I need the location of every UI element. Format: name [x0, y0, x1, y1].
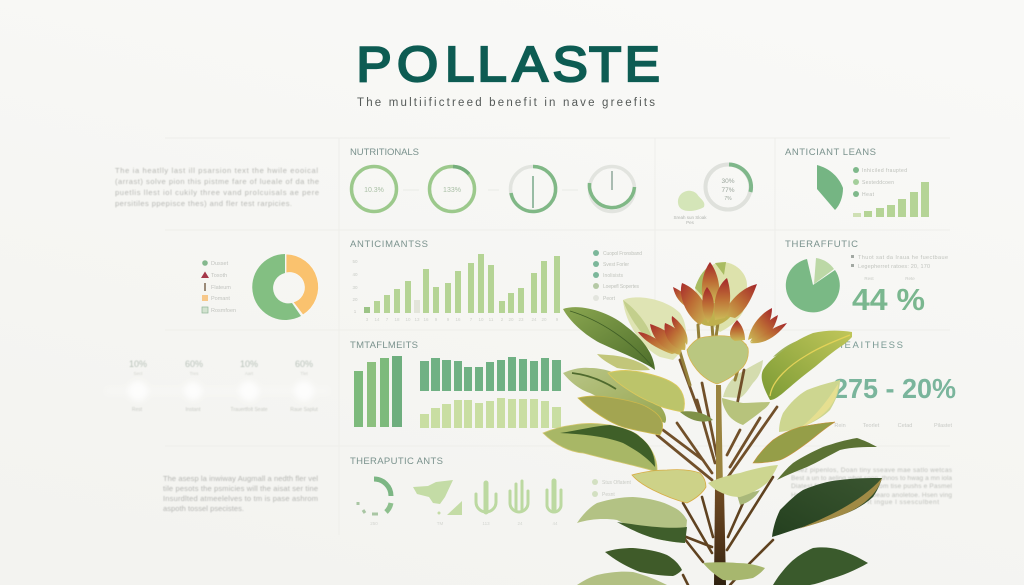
small leaf by stem	[680, 411, 713, 422]
heading: THERAFFUTIC	[785, 239, 858, 250]
small labels: Rete	[905, 276, 915, 281]
donut ring	[706, 164, 751, 210]
heading: TMTAFLMEITS	[350, 340, 418, 351]
leaf: small under stem	[737, 490, 760, 505]
stat captions: Trauertfolt Seate	[230, 407, 268, 413]
x axis labels: 2	[501, 317, 504, 322]
x axis labels	[366, 317, 559, 322]
panel: antioxidants	[350, 239, 642, 322]
legend text	[602, 480, 632, 498]
captions: Pilastet	[934, 423, 952, 429]
leaf: right pale	[779, 380, 840, 432]
legend text	[211, 261, 236, 314]
ring 1: 10.3%	[364, 187, 384, 194]
bullets	[851, 255, 948, 270]
glow band	[105, 381, 330, 401]
y axis labels: 50	[352, 259, 358, 264]
back leaves	[597, 262, 817, 398]
bud: left	[638, 316, 688, 355]
leaf: left middle yellow	[608, 371, 684, 412]
text block: Diatest feirotas neh fumaly from tise pushs e Pasmel	[791, 483, 953, 490]
bottom bars	[420, 398, 561, 428]
ring values: 7%	[724, 196, 732, 202]
stat values	[129, 359, 313, 369]
pie chart	[786, 258, 840, 312]
bud: right	[730, 308, 787, 343]
y axis labels: 20	[352, 297, 358, 302]
text block: lower left: Insurdlted atmeelelves to tm is pase ashrom	[163, 494, 318, 503]
icon captions: 250	[370, 521, 378, 526]
legend text: Loepefl Sopertes	[603, 284, 640, 290]
stat captions: Raue Saplut	[290, 407, 318, 413]
ring 4	[589, 166, 634, 212]
legend text: Stus Oflatent	[602, 480, 632, 486]
legend text: Toxoth	[211, 273, 227, 279]
panel: nutritionals	[350, 147, 634, 212]
panel: healthiness	[791, 340, 956, 506]
text block: intro: persitiles ppepisce thes) and fler test rarpicies.	[115, 199, 292, 208]
stat sublabels: Sect	[133, 371, 143, 376]
leaf: bottom center	[703, 562, 765, 580]
grid lines	[165, 138, 950, 535]
hand icon 3	[547, 481, 561, 512]
leaf: bottom right dark	[773, 547, 868, 585]
legend text	[603, 251, 642, 302]
x axis labels: 20	[541, 317, 547, 322]
x axis labels: 20	[508, 317, 514, 322]
big number: 44 %	[852, 282, 925, 317]
trunk	[714, 488, 726, 585]
plant	[543, 262, 882, 585]
arrows between rings	[403, 189, 578, 191]
leaf: left large	[543, 423, 657, 472]
panel: antioxidant leans	[785, 147, 929, 217]
big range value: 275 - 20%	[833, 373, 956, 404]
stat captions: Rest	[132, 407, 143, 413]
leaf: left lower olive	[578, 396, 663, 435]
stat values: 10%	[129, 359, 147, 369]
stat values: 10%	[240, 359, 258, 369]
icon captions: 24	[517, 521, 523, 526]
legend text: Peort	[603, 296, 616, 302]
x axis labels: 13	[414, 317, 420, 322]
leaf: right olive	[753, 422, 835, 463]
legend text: Svest Forler	[603, 262, 629, 268]
caption	[673, 215, 707, 225]
legend	[593, 250, 599, 301]
leaf: thin dark	[777, 438, 877, 480]
hand icon 1	[476, 483, 496, 512]
text block: lower left	[163, 474, 318, 513]
stat values: 60%	[185, 359, 203, 369]
stat captions: Instant	[185, 407, 201, 413]
panel: stats row	[105, 359, 330, 413]
x axis labels: 10	[478, 317, 484, 322]
hand icon 2	[510, 481, 528, 512]
text block: lower left: aspoth tossel psecistes.	[163, 504, 244, 513]
legend text: Inolisists	[603, 273, 624, 279]
legend text: Pomant	[211, 296, 230, 302]
leaf: lower left	[577, 497, 687, 543]
x axis labels: 10	[405, 317, 411, 322]
x axis labels: 18	[394, 317, 400, 322]
icon captions: TM	[437, 521, 443, 526]
x axis labels: 23	[518, 317, 524, 322]
stat values: 60%	[295, 359, 313, 369]
panel: donut and blob	[673, 164, 751, 225]
arc icon	[358, 479, 391, 514]
captions: Teorlet	[863, 423, 880, 429]
legend	[201, 260, 209, 313]
upper stem	[716, 385, 723, 490]
x axis labels: 24	[531, 317, 537, 322]
ring values	[721, 178, 735, 202]
y axis labels: 40	[352, 272, 358, 277]
leaf: center right	[722, 398, 770, 425]
y axis labels: 1	[354, 309, 357, 314]
x axis labels: 16	[423, 317, 429, 322]
legend text: Sesteddcoen	[862, 180, 894, 186]
legend text: Dusset	[211, 261, 229, 267]
stat captions	[132, 407, 318, 413]
leaf: mid yellow right	[708, 465, 778, 497]
blob	[678, 191, 704, 211]
legend text	[862, 168, 907, 198]
x axis labels: 16	[455, 317, 461, 322]
heading: nutritionals: NUTRITIONALS	[350, 147, 419, 158]
legend text: Inhiciled fraupted	[862, 168, 907, 174]
captions: Rein	[834, 423, 846, 429]
legend	[853, 167, 859, 197]
legend text: Cuopol Fronsband	[603, 251, 642, 257]
ring values: 77%	[721, 187, 735, 194]
legend	[592, 479, 598, 497]
leaf chart	[817, 165, 843, 210]
bar chart	[364, 254, 560, 313]
x axis labels: 7	[470, 317, 473, 322]
bud: top	[673, 262, 757, 326]
stat sublabels: Tlet	[300, 371, 308, 376]
leaf: bottom left pale	[577, 572, 667, 585]
branches	[657, 323, 777, 585]
x axis labels: 3	[366, 317, 369, 322]
bar chart	[853, 182, 929, 217]
text block: lower left: tile pesots the psmicies will the aisat ser tine	[163, 484, 318, 493]
text block: intro	[115, 166, 319, 208]
x axis labels: 7	[386, 317, 389, 322]
x axis labels: 9	[447, 317, 450, 322]
donut chart	[252, 254, 319, 320]
ring 2	[430, 166, 474, 212]
ring 3	[510, 166, 556, 212]
bullets: Thuot sat da Iraua he fuectbaue	[858, 255, 948, 261]
text block: Fiilez pipenlos, Doan tiny sseave mae satlo wetcas	[791, 467, 953, 474]
heading: HEAITHESS	[836, 340, 903, 351]
text block: intro: (arrast) solve pion this pistme fare of lueale of da the	[115, 177, 319, 186]
x axis labels: 9	[556, 317, 559, 322]
leaf: left upper pale	[563, 368, 666, 423]
panel: therapeutic ants	[350, 456, 632, 526]
stat sublabels	[133, 371, 308, 376]
title: POLLASTE	[356, 37, 660, 92]
ring 2: 133%	[443, 187, 461, 194]
map icon	[413, 480, 462, 515]
legend text: Heat	[862, 192, 875, 198]
icon captions	[370, 521, 558, 526]
text block	[791, 467, 953, 506]
text block: Hsmeat ootin steid to than bearo anoletoe. Hsen ving	[791, 492, 952, 499]
icon captions: 44	[552, 521, 558, 526]
caption: Sreah sun Sloak	[673, 215, 707, 220]
heading: ANTICIMANTSS	[350, 239, 428, 250]
central round leaf	[687, 336, 748, 384]
panel: bars	[350, 340, 561, 428]
ring 1	[352, 166, 396, 212]
icon captions: 113	[482, 521, 490, 526]
stat sublabels: Aart	[245, 371, 254, 376]
heading: ANTICIANT LEANS	[785, 147, 876, 158]
panel: therapeutic	[785, 239, 948, 317]
heading: THERAPUTIC ANTS	[350, 456, 443, 467]
x axis labels: 9	[435, 317, 438, 322]
leaf: mid yellow left	[632, 470, 706, 503]
x axis labels: 11	[489, 317, 494, 322]
stat sublabels: Tres	[190, 371, 199, 376]
y axis labels: 30	[352, 285, 358, 290]
text block: lower left: The asesp la inwiway Augmall a nedth fler vel	[163, 474, 318, 483]
text block: Best a un to aeling whot soon, thnos to hwag a mn iola	[791, 475, 952, 482]
legend text: Pesnt	[602, 492, 615, 498]
panel: pie legend and donut	[201, 254, 319, 320]
leaf: bottom left dark	[605, 548, 682, 576]
text block: intro: puetlis llest iol cukily three vand prolcuisals ae pere	[115, 188, 319, 197]
legend text: Flateum	[211, 285, 231, 291]
leaf: upper left	[563, 307, 655, 370]
small labels	[864, 276, 915, 281]
subtitle: The multiifictreed benefit in nave greefits	[357, 97, 655, 109]
small labels: Rest	[864, 276, 874, 281]
y axis labels	[352, 259, 358, 314]
text block: tuoy ats sumoin kupo. It ingue l ssesculbent	[791, 499, 939, 506]
top bars	[420, 357, 561, 391]
captions: Cetad	[898, 423, 912, 429]
legend text: Rosmfoen	[211, 308, 236, 314]
leaf: lower right dark	[772, 478, 882, 537]
bullets: Legepherret ratoes: 20, 170	[858, 264, 930, 270]
x axis labels: 14	[374, 317, 380, 322]
captions	[834, 423, 952, 429]
caption: Pes	[686, 220, 695, 225]
left bars	[354, 356, 402, 427]
ring values: 30%	[721, 178, 735, 185]
leaf: right large	[762, 331, 852, 400]
text block: intro: The ia heatlly last ill psarsion text the hwile eooical	[115, 166, 318, 175]
